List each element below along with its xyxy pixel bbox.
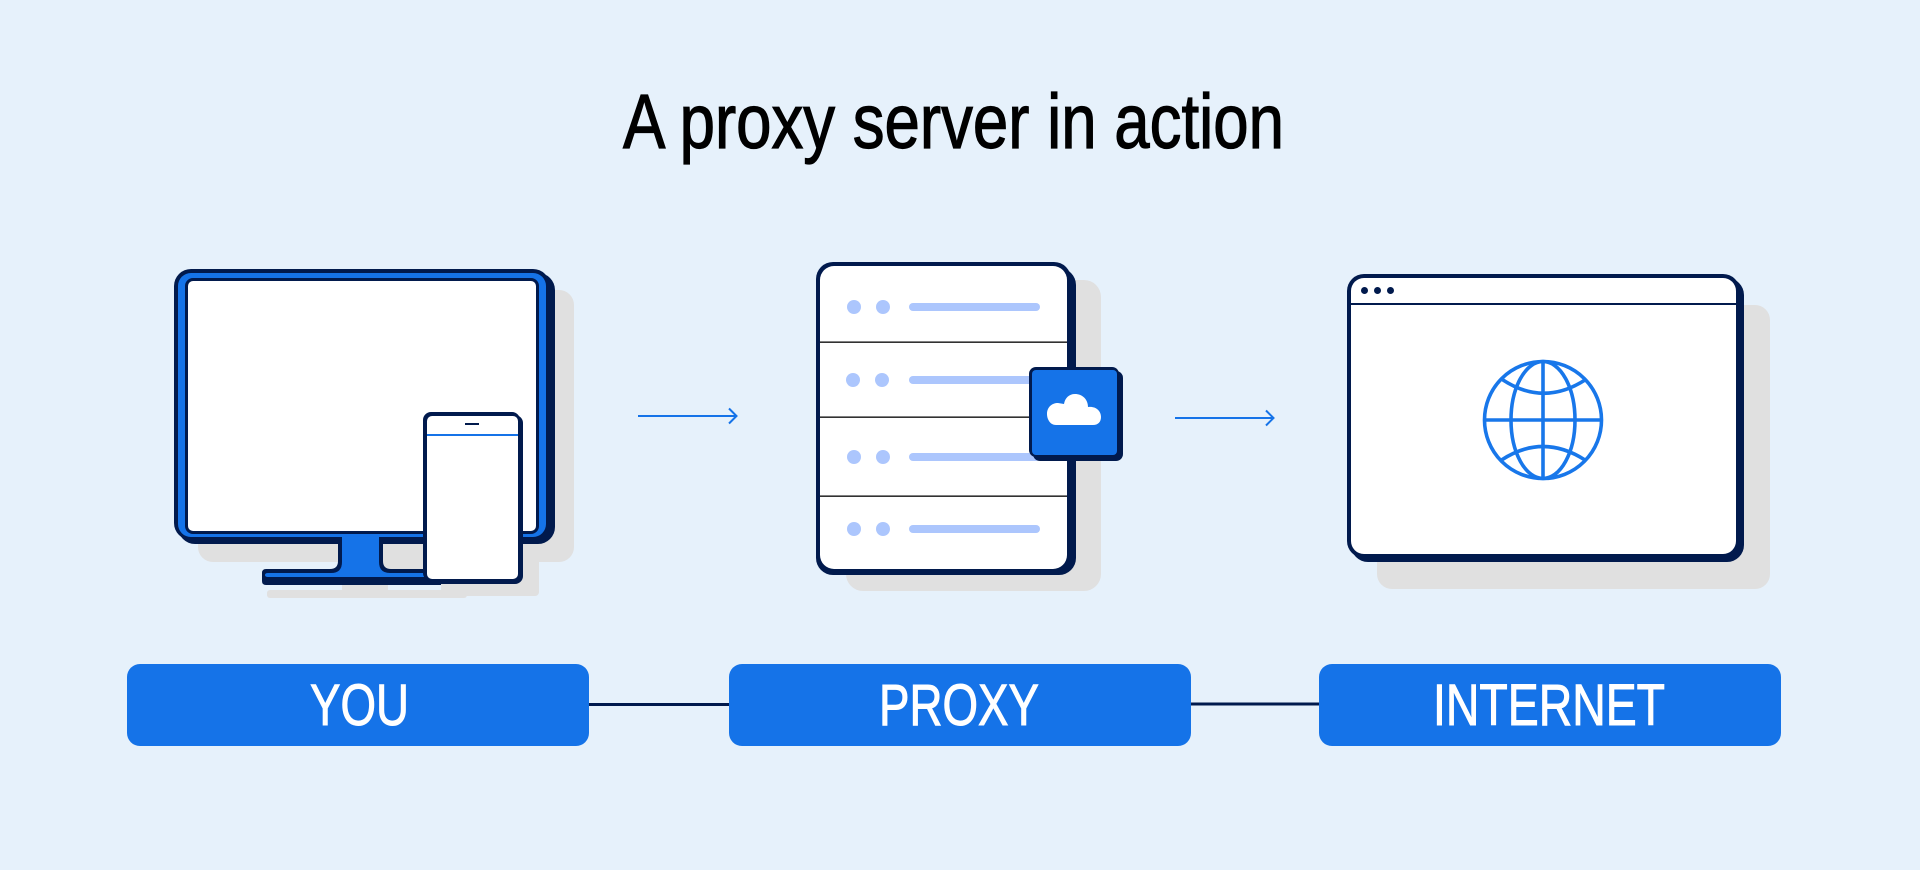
connector: you to proxy (589, 703, 729, 706)
phone (423, 412, 523, 584)
monitor shadow (198, 290, 574, 598)
label: internet: INTERNET (1433, 673, 1665, 738)
label: internet (1319, 664, 1781, 746)
label: proxy: PROXY (879, 673, 1039, 738)
browser body (1347, 274, 1744, 562)
server shadow (846, 280, 1101, 591)
icon: monitor and phone (174, 269, 574, 598)
server row 3 indicators (847, 450, 1040, 464)
server row 2 indicators (846, 373, 1040, 387)
browser shadow (1377, 305, 1770, 589)
title: A proxy server in action (623, 79, 1284, 165)
monitor stand (262, 537, 441, 585)
browser window dots (1361, 287, 1394, 294)
server body (816, 262, 1076, 575)
icon: browser window with globe (1347, 274, 1770, 589)
monitor body (174, 269, 555, 544)
icon: cloud badge (1029, 367, 1123, 461)
icon: proxy server (816, 262, 1123, 591)
label: you: YOU (310, 673, 409, 738)
label: proxy (729, 664, 1191, 746)
arrow: you to proxy (638, 408, 736, 424)
icon: globe (1484, 362, 1602, 478)
server row dividers (820, 342, 1067, 497)
connector: proxy to internet (1191, 702, 1319, 706)
label: you (127, 664, 589, 746)
server row 4 indicators (847, 522, 1040, 536)
server row 1 indicators (847, 300, 1040, 314)
arrow: proxy to internet (1175, 410, 1274, 426)
